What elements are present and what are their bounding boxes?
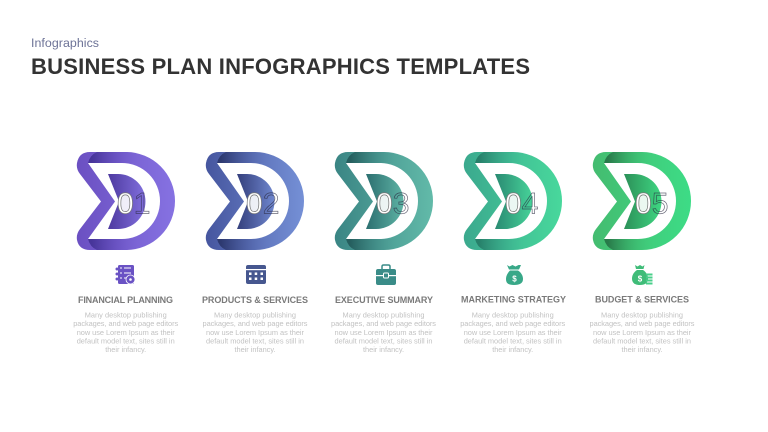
- heading: EXECUTIVE SUMMARY: [335, 295, 433, 305]
- heading: BUDGET & SERVICES: [595, 294, 689, 304]
- description: default model text, sites still in: [593, 336, 691, 346]
- description: Many desktop publishing: [472, 310, 554, 320]
- description: [590, 310, 695, 354]
- description: Many desktop publishing: [601, 310, 683, 320]
- number 01: 01: [117, 188, 150, 220]
- description: Many desktop publishing: [85, 310, 167, 320]
- description: now use Lorem Ipsum as their: [593, 328, 692, 337]
- description: default model text, sites still in: [464, 336, 562, 346]
- description: [73, 310, 178, 354]
- description: packages, and web page editors: [73, 319, 178, 328]
- D shape 02: [206, 152, 304, 250]
- icon: money bag: [506, 265, 523, 285]
- description: their infancy.: [492, 345, 533, 354]
- D shape 03: [335, 152, 433, 250]
- description: default model text, sites still in: [206, 336, 304, 346]
- icon: money bag: $: [512, 274, 517, 284]
- number 03: 03: [376, 188, 409, 220]
- description: now use Lorem Ipsum as their: [334, 328, 433, 337]
- D shape 01: [77, 152, 175, 250]
- panel: step 03: [331, 152, 436, 354]
- description: packages, and web page editors: [590, 319, 695, 328]
- description: Many desktop publishing: [342, 310, 424, 320]
- D shape 04: [464, 152, 562, 250]
- title: BUSINESS PLAN INFOGRAPHICS TEMPLATES: [31, 54, 530, 79]
- description: their infancy.: [105, 345, 146, 354]
- subtitle: Infographics: [31, 36, 99, 50]
- panel: step 01: [73, 152, 178, 354]
- number 05: 05: [635, 188, 668, 220]
- icon: briefcase: [376, 265, 396, 285]
- description: [202, 310, 308, 354]
- description: default model text, sites still in: [77, 336, 175, 346]
- description: packages, and web page editors: [331, 319, 436, 328]
- description: their infancy.: [234, 345, 276, 354]
- description: default model text, sites still in: [334, 336, 432, 346]
- heading: FINANCIAL PLANNING: [78, 295, 173, 305]
- icon: money bag with coins: $: [638, 274, 643, 284]
- description: packages, and web page editors: [202, 319, 308, 328]
- number 02: 02: [246, 188, 279, 220]
- description: [331, 310, 436, 354]
- description: now use Lorem Ipsum as their: [77, 328, 175, 337]
- description: now use Lorem Ipsum as their: [206, 328, 305, 337]
- description: packages, and web page editors: [460, 319, 565, 328]
- icon: calendar: [246, 265, 266, 284]
- description: [460, 310, 565, 354]
- description: Many desktop publishing: [214, 310, 296, 320]
- description: their infancy.: [363, 345, 404, 354]
- panel: step 05: [590, 152, 695, 354]
- heading: MARKETING STRATEGY: [461, 294, 566, 304]
- description: their infancy.: [622, 345, 662, 354]
- panel: step 02: [202, 152, 308, 354]
- icon: money bag with coins: [632, 265, 652, 285]
- D shape 05: [593, 152, 691, 250]
- heading: PRODUCTS & SERVICES: [202, 295, 308, 305]
- number 04: 04: [505, 188, 538, 220]
- panel: step 04: [460, 152, 566, 354]
- description: now use Lorem Ipsum as their: [464, 328, 562, 337]
- icon: checklist: [116, 265, 135, 284]
